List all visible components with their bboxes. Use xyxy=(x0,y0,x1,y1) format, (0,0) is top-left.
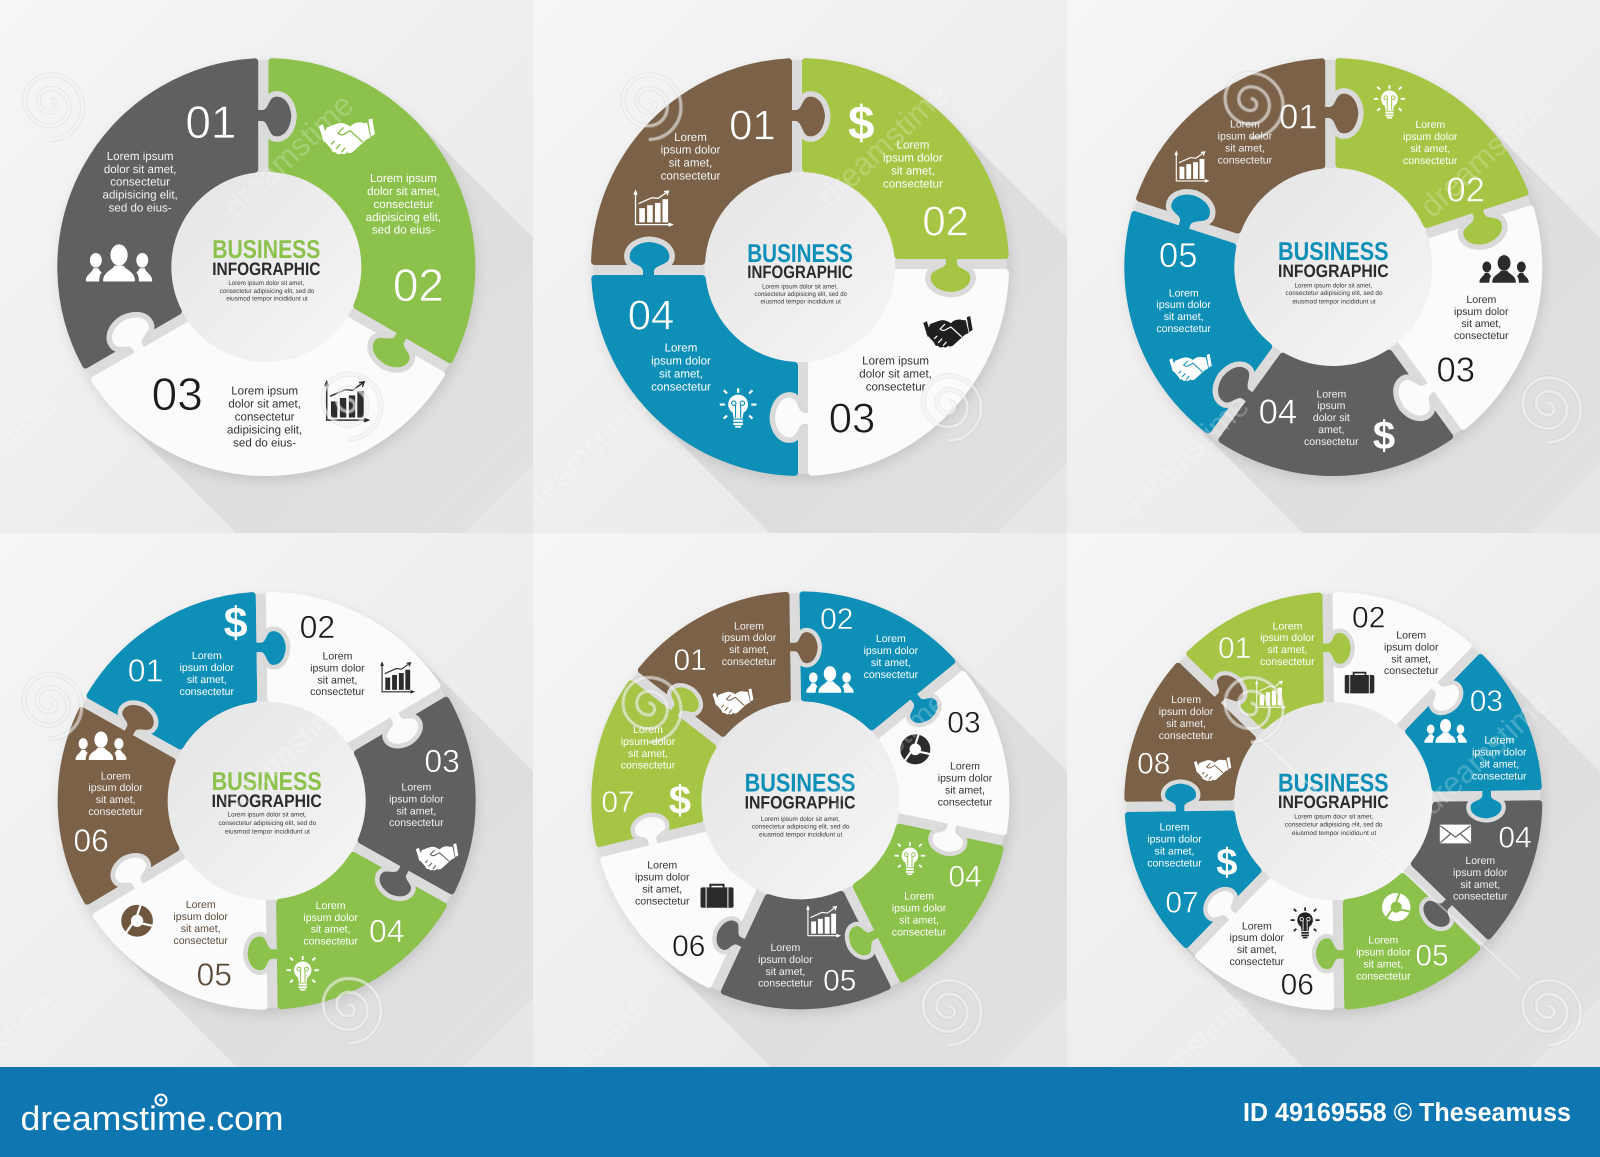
segment 02 xyxy=(800,591,956,730)
center title: INFOGRAPHIC xyxy=(212,791,322,811)
segment 03: 03 xyxy=(1470,684,1503,717)
segment 06 xyxy=(1199,864,1382,1047)
segment 04: consectetur xyxy=(1304,435,1359,447)
segment 02: consectetur xyxy=(1403,154,1458,166)
segment 01: Lorem xyxy=(192,650,222,662)
center title: Lorem ipsum dolor sit amet, xyxy=(228,280,304,287)
segment 07: 07 xyxy=(601,785,635,818)
segment 07: $ xyxy=(1216,840,1237,883)
puzzle joints xyxy=(595,593,1005,994)
segment 03: 03 xyxy=(152,368,203,420)
segment 04: sit amet, xyxy=(1460,878,1500,890)
segment 08: 08 xyxy=(1137,746,1170,780)
segment 03: sit amet, xyxy=(945,784,985,796)
segment 01: sit amet, xyxy=(669,156,712,169)
segment 02: 02 xyxy=(922,198,969,245)
footer bar xyxy=(0,1067,1600,1157)
watermark: dreamstime xyxy=(213,684,357,822)
segment 01: Lorem xyxy=(1272,620,1302,632)
segment 05: 05 xyxy=(1415,938,1449,972)
watermark: dreamstime xyxy=(1413,684,1557,822)
segment 07: Lorem xyxy=(633,723,663,735)
segment 01: Lorem xyxy=(674,131,707,144)
segment 01 xyxy=(61,62,255,365)
center title: consectetur adipisicing elit, sed do xyxy=(220,287,314,295)
watermark xyxy=(1112,678,1581,1125)
segment 05: consectetur xyxy=(173,934,228,946)
segment 05: consectetur xyxy=(1356,970,1411,982)
segment 01: sit amet, xyxy=(187,673,227,685)
watermark xyxy=(510,678,981,1125)
segment 02: consectetur xyxy=(1384,665,1438,677)
segment 05: 05 xyxy=(823,963,856,997)
watermark xyxy=(22,672,384,1046)
segment 03: consectetur xyxy=(938,796,992,808)
segment 06: ipsum dolor xyxy=(88,782,143,794)
center title: consectetur adipisicing elit, sed do xyxy=(1286,290,1382,297)
segment 05: Lorem xyxy=(1169,287,1199,299)
segment 02: sit amet, xyxy=(891,164,935,177)
segment 03: sed do eius- xyxy=(233,436,296,449)
segment 04: sit amet, xyxy=(899,914,939,926)
segment 01: sed do eius- xyxy=(109,201,172,214)
puzzle joints xyxy=(75,60,453,392)
watermark xyxy=(22,72,384,442)
segment 04: dolor sit xyxy=(1313,412,1350,423)
segment 04: ipsum dolor xyxy=(651,354,711,367)
segment 07 xyxy=(1128,814,1259,945)
segment 04: consectetur xyxy=(1453,890,1508,902)
segment 01: dolor sit amet, xyxy=(104,163,176,176)
segment 03 xyxy=(91,318,445,476)
center title: INFOGRAPHIC xyxy=(747,262,853,282)
puzzle joints xyxy=(78,593,455,1008)
segment 07: sit amet, xyxy=(628,747,668,759)
segment 06: consectetur xyxy=(635,895,690,907)
center title: eiusmod tempor incididunt ut xyxy=(225,828,310,835)
segment 03: sit amet, xyxy=(1479,758,1519,770)
footer logo: dreamstime.com xyxy=(20,1100,284,1138)
segment 03: Lorem ipsum xyxy=(231,384,298,397)
segment 05 xyxy=(92,860,268,1010)
segment 01: ipsum dolor xyxy=(180,662,234,673)
segment 02: 02 xyxy=(1352,600,1385,634)
segment 02: ipsum dolor xyxy=(883,151,943,164)
segment 02: 02 xyxy=(820,602,853,635)
segment 07: $ xyxy=(669,778,691,822)
segment 06: consectetur xyxy=(1230,955,1284,967)
segment 02: ipsum dolor xyxy=(864,645,918,656)
panel: five-step puzzle circle xyxy=(1067,58,1600,533)
center title: Lorem ipsum dolor sit amet, xyxy=(762,283,838,290)
segment 05: consectetur xyxy=(1156,322,1211,334)
segment 01 xyxy=(89,596,254,747)
center title xyxy=(745,768,855,838)
segment 04: Lorem xyxy=(665,342,697,354)
segment 02 xyxy=(806,62,1005,256)
segment 06: sit amet, xyxy=(96,794,136,805)
segment 06: ipsum dolor xyxy=(635,871,690,883)
watermark: dreamstime xyxy=(1112,387,1256,525)
segment 08: sit amet, xyxy=(1166,717,1206,729)
segment 01: 01 xyxy=(729,102,776,149)
segment 02: Lorem xyxy=(1415,119,1445,131)
center title: eiusmod tempor incididunt ut xyxy=(1292,830,1376,837)
segment 03: Lorem xyxy=(1466,294,1496,305)
segment 05 xyxy=(1346,875,1478,1006)
segment 04 xyxy=(852,824,1004,982)
segment 08: ipsum dolor xyxy=(1159,705,1213,717)
center title xyxy=(212,235,320,302)
segment 03 xyxy=(354,696,476,894)
segment 02: 02 xyxy=(300,609,335,645)
segment 03: Lorem xyxy=(401,781,431,793)
segment 01: Lorem ipsum xyxy=(107,150,174,163)
segment 02: ipsum dolor xyxy=(1384,641,1438,653)
segment 05: sit amet, xyxy=(1363,958,1403,970)
watermark xyxy=(620,72,984,443)
segment 06: Lorem xyxy=(1242,920,1272,932)
segment 05 xyxy=(1124,211,1272,434)
segment 02: sit amet, xyxy=(1391,653,1431,665)
segment 02: Lorem ipsum xyxy=(370,172,437,185)
puzzle joints xyxy=(593,60,1007,474)
center title xyxy=(747,239,853,305)
segment 01: ipsum dolor xyxy=(1218,130,1272,142)
segment 05: ipsum dolor xyxy=(1156,299,1211,311)
segment 03: adipisicing elit, xyxy=(227,423,302,436)
segment 05: Lorem xyxy=(770,942,800,953)
segment 05: Lorem xyxy=(186,899,216,911)
segment 08: consectetur xyxy=(1159,729,1213,741)
segment 02 xyxy=(266,592,440,742)
segment 02: ipsum dolor xyxy=(310,662,365,674)
watermark: dreamstime xyxy=(217,86,360,224)
segment 01: ipsum dolor xyxy=(1260,632,1315,644)
segment 01: consectetur xyxy=(1218,154,1272,166)
segment 01 xyxy=(595,62,789,262)
segment 07: consectetur xyxy=(1147,857,1202,869)
segment 04: Lorem xyxy=(316,899,346,911)
segment 08 xyxy=(1088,666,1271,849)
center title: eiusmod tempor incididunt ut xyxy=(226,295,308,302)
segment 06: ipsum dolor xyxy=(1230,932,1284,944)
center title: BUSINESS xyxy=(747,239,853,268)
segment 02: Lorem xyxy=(897,138,929,151)
segment 02: sit amet, xyxy=(317,674,357,686)
segment 01: 01 xyxy=(1218,631,1251,664)
segment 05: sit amet, xyxy=(765,965,805,977)
segment 04: 04 xyxy=(1259,392,1297,431)
segment 07: ipsum dolor xyxy=(621,735,675,747)
segment 01: sit amet, xyxy=(1225,142,1265,154)
center title: eiusmod tempor incididunt ut xyxy=(761,298,841,305)
segment 05: ipsum dolor xyxy=(1356,946,1411,958)
segment 03: ipsum dolor xyxy=(938,772,992,784)
segment 07: sit amet, xyxy=(1155,845,1194,857)
segment 04: consectetur xyxy=(892,926,946,938)
segment 01: consectetur xyxy=(661,169,720,182)
watermark: dreamstime xyxy=(811,76,955,214)
segment 04 xyxy=(595,279,795,472)
segment 04: consectetur xyxy=(303,935,358,947)
segment 04: consectetur xyxy=(651,380,711,393)
puzzle joints xyxy=(1132,60,1538,449)
segment 06: 06 xyxy=(1281,967,1314,1001)
segment 02 xyxy=(268,58,476,364)
segment 06: 06 xyxy=(73,823,109,859)
segment 01: 01 xyxy=(1279,97,1318,136)
segment 03: consectetur xyxy=(866,380,925,393)
segment 03 xyxy=(880,670,1010,836)
segment 07: consectetur xyxy=(621,759,675,771)
segment 04: $ xyxy=(1373,413,1395,458)
segment 03: consectetur xyxy=(235,410,295,423)
segment 02 xyxy=(1335,58,1528,228)
segment 03: Lorem xyxy=(950,760,980,772)
segment 02: dolor sit amet, xyxy=(367,185,440,198)
segment 02: sit amet, xyxy=(1410,143,1450,154)
segment 03: consectetur xyxy=(389,817,444,829)
segment 01: consectetur xyxy=(180,685,234,697)
center title: Lorem ipsum dolor sit amet, xyxy=(1294,813,1373,820)
segment 06 xyxy=(604,828,771,1002)
segment 05: ipsum dolor xyxy=(173,911,228,922)
segment 01: ipsum dolor xyxy=(722,632,776,644)
center title xyxy=(1278,237,1389,305)
segment 03: Lorem ipsum xyxy=(862,354,929,367)
segment 06: sit amet, xyxy=(1237,944,1277,955)
segment 07 xyxy=(542,684,739,883)
segment 04: sit amet, xyxy=(311,923,351,935)
center title: BUSINESS xyxy=(212,767,322,796)
center title: Lorem ipsum dolor sit amet, xyxy=(1295,282,1372,289)
segment 05: Lorem xyxy=(1368,934,1398,946)
segment 03: sit amet, xyxy=(1461,317,1501,329)
watermark: dreamstime xyxy=(1413,86,1557,224)
segment 03: 03 xyxy=(424,743,460,779)
segment 05: ipsum dolor xyxy=(758,953,813,965)
segment 04 xyxy=(1218,350,1454,476)
center title xyxy=(1278,768,1389,837)
segment 01: consectetur xyxy=(1260,655,1315,667)
segment 06: 06 xyxy=(672,929,705,962)
segment 04: 04 xyxy=(628,292,674,338)
segment 03: consectetur xyxy=(1454,329,1509,341)
segment 06: Lorem xyxy=(647,859,677,871)
segment 01: sit amet, xyxy=(1267,644,1307,655)
center title: eiusmod tempor incididunt ut xyxy=(759,831,843,838)
segment 04: 04 xyxy=(948,860,982,893)
segment 04: ipsum dolor xyxy=(303,911,358,923)
segment 01: 01 xyxy=(185,96,236,148)
segment 02 xyxy=(1285,555,1468,738)
segment 01: adipisicing elit, xyxy=(103,188,178,201)
segment 05: 05 xyxy=(1159,236,1198,274)
center title: BUSINESS xyxy=(1278,768,1389,797)
segment 02: adipisicing elit, xyxy=(366,211,441,223)
segment 02: consectetur xyxy=(864,668,918,680)
segment 01: 01 xyxy=(128,653,163,688)
segment 05: consectetur xyxy=(758,977,813,989)
segment 02: consectetur xyxy=(374,198,433,211)
center title: consectetur adipisicing elit, sed do xyxy=(219,819,316,827)
segment 04: amet, xyxy=(1318,423,1344,435)
center title: INFOGRAPHIC xyxy=(212,259,320,279)
segment 03: sit amet, xyxy=(396,805,436,817)
segment 02: Lorem xyxy=(1396,629,1426,641)
center title: eiusmod tempor incididunt ut xyxy=(1292,298,1376,305)
segment 06: sit amet, xyxy=(642,883,682,895)
center title: BUSINESS xyxy=(745,768,855,797)
panel: three-step puzzle circle xyxy=(57,58,533,533)
segment 02: Lorem xyxy=(322,650,352,662)
segment 05: sit amet, xyxy=(181,922,221,934)
segment 02: consectetur xyxy=(883,177,943,190)
segment 01: Lorem xyxy=(734,620,764,632)
center title: INFOGRAPHIC xyxy=(745,793,855,813)
segment 08: Lorem xyxy=(1171,694,1201,705)
panel: four-step puzzle circle xyxy=(533,58,1067,533)
segment 03: 03 xyxy=(947,705,981,739)
segment 01: ipsum dolor xyxy=(661,144,720,156)
center title: consectetur adipisicing elit, sed do xyxy=(752,823,850,830)
segment 01: 01 xyxy=(673,643,707,677)
segment 03: ipsum dolor xyxy=(1472,746,1527,758)
segment 04: ipsum dolor xyxy=(1453,866,1508,878)
segment 02: Lorem xyxy=(876,633,906,645)
center title: INFOGRAPHIC xyxy=(1278,261,1389,281)
segment 03: consectetur xyxy=(1472,770,1527,782)
center title: consectetur adipisicing elit, sed do xyxy=(754,290,847,298)
segment 06: Lorem xyxy=(101,770,131,782)
segment 04: sit amet, xyxy=(659,367,703,380)
panel: seven-step puzzle circle xyxy=(533,533,1067,1067)
segment 02: consectetur xyxy=(310,686,365,698)
center title: INFOGRAPHIC xyxy=(1278,792,1389,812)
segment 01 xyxy=(1189,596,1321,727)
segment 04: Lorem xyxy=(1465,854,1495,866)
segment 06 xyxy=(58,707,180,905)
segment 04: Lorem xyxy=(1316,388,1346,400)
segment 01: Lorem xyxy=(1230,118,1260,130)
segment 02: sit amet, xyxy=(871,656,911,668)
segment 02: 02 xyxy=(393,260,444,311)
segment 03: 03 xyxy=(1436,350,1475,389)
watermark: dreamstime xyxy=(811,684,955,822)
segment 05: sit amet, xyxy=(1164,311,1204,322)
center title: BUSINESS xyxy=(1278,237,1389,266)
segment 01 xyxy=(1140,62,1322,230)
watermark: dreamstime xyxy=(1112,987,1256,1125)
segment 04: Lorem xyxy=(904,890,934,902)
segment 01 xyxy=(640,595,788,734)
center title: Lorem ipsum dolor sit amet, xyxy=(228,811,306,818)
center title: Lorem ipsum dolor sit amet, xyxy=(761,815,840,822)
segment 02: 02 xyxy=(1446,170,1485,209)
segment 03: ipsum dolor xyxy=(389,793,444,805)
footer credit: ID 49169558 © Theseamuss xyxy=(1243,1097,1571,1127)
segment 04: 04 xyxy=(369,913,405,949)
segment 05: 05 xyxy=(197,956,232,992)
segment 07: Lorem xyxy=(1160,821,1189,833)
segment 05 xyxy=(720,890,891,1010)
segment 04 xyxy=(1396,753,1579,936)
segment 01: consectetur xyxy=(722,655,776,667)
segment 06: consectetur xyxy=(88,805,143,817)
segment 03 xyxy=(812,273,1005,472)
panel: six-step puzzle circle xyxy=(24,533,533,1067)
segment 04: ipsum dolor xyxy=(892,902,946,914)
segment 03: ipsum dolor xyxy=(1454,305,1509,317)
watermark: dreamstime xyxy=(510,987,654,1125)
segment 03: dolor sit amet, xyxy=(859,367,932,380)
puzzle joints xyxy=(1126,594,1541,1008)
panel: eight-step puzzle circle xyxy=(1067,533,1600,1157)
segment 01: consectetur xyxy=(110,176,170,188)
segment 04 xyxy=(279,854,445,1006)
segment 03: Lorem xyxy=(1484,734,1514,746)
segment 03 xyxy=(1408,657,1538,788)
segment 01: sit amet, xyxy=(729,644,769,655)
segment 03: 03 xyxy=(829,395,875,442)
watermark: dreamstime xyxy=(510,387,654,525)
segment 02: sed do eius- xyxy=(372,223,435,236)
center title xyxy=(212,767,322,835)
segment 07: ipsum dolor xyxy=(1147,833,1202,845)
segment 02: $ xyxy=(848,96,874,149)
segment 07: 07 xyxy=(1165,885,1199,919)
center title: consectetur adipisicing elit, sed do xyxy=(1285,821,1382,828)
segment 02: ipsum dolor xyxy=(1403,131,1458,143)
center title: BUSINESS xyxy=(212,235,320,264)
segment 04: 04 xyxy=(1498,820,1532,854)
segment 01: $ xyxy=(224,598,248,646)
watermark xyxy=(1200,70,1583,444)
segment 03 xyxy=(1400,205,1542,430)
segment 04: ipsum xyxy=(1317,400,1345,412)
segment 03: dolor sit amet, xyxy=(228,397,301,410)
